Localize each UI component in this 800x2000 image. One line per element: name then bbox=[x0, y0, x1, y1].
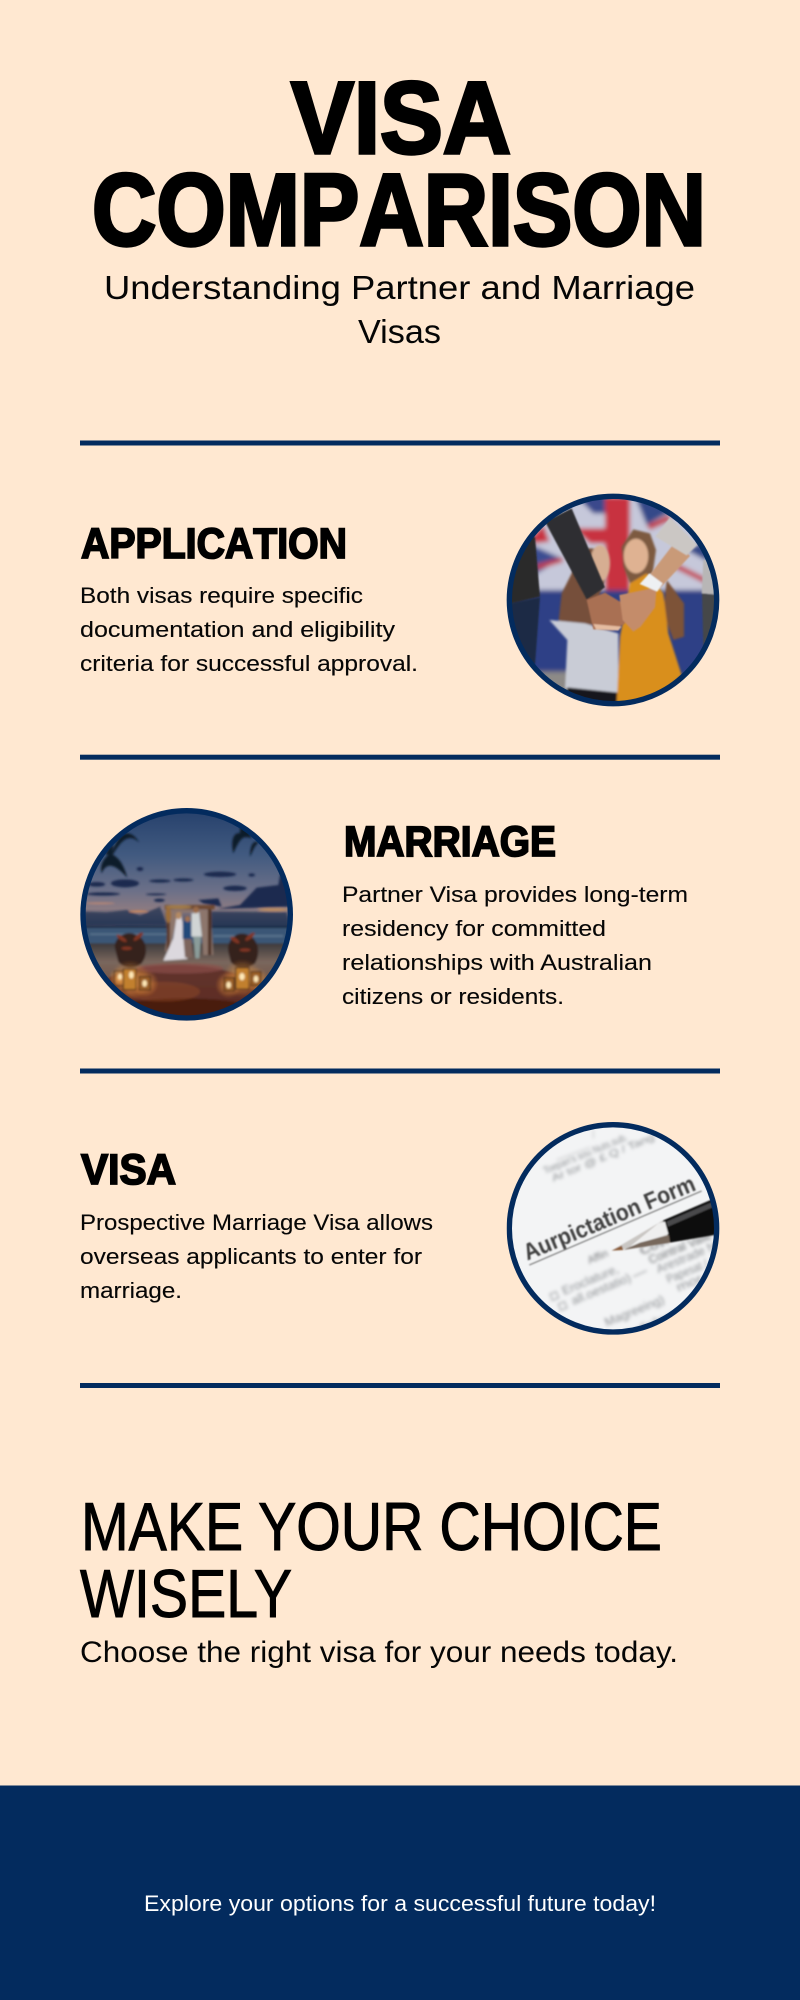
clouds bbox=[83, 867, 292, 927]
panel: marriage bbox=[80, 808, 686, 1021]
heading: application: APPLICATION bbox=[81, 520, 347, 568]
text block: marriage: citizens or residents. bbox=[342, 984, 564, 1009]
image: family holding hands before Australian flag bbox=[506, 494, 720, 706]
image: application form and pen: Ar tor @ £ Q / Tang bbox=[550, 1132, 656, 1184]
image border bbox=[83, 811, 290, 1018]
title bbox=[92, 61, 706, 267]
panel: application bbox=[80, 494, 720, 706]
text block: marriage: Partner Visa provides long-term bbox=[342, 882, 688, 907]
water bbox=[86, 927, 287, 946]
text block: marriage bbox=[342, 882, 688, 1009]
arm sleeve bbox=[545, 508, 605, 599]
image: application form and pen: Cointral Valle bbox=[646, 1228, 714, 1267]
text block: visa: marriage. bbox=[80, 1278, 182, 1303]
girl right bbox=[663, 580, 684, 640]
text block: marriage: residency for committed bbox=[342, 916, 606, 941]
image: beach wedding at dusk bbox=[80, 808, 293, 1021]
text block: visa bbox=[80, 1210, 433, 1303]
hands bbox=[587, 593, 625, 631]
image: application form and pen: Medicilant bbox=[619, 1308, 677, 1343]
text block: application: Both visas require specific bbox=[80, 583, 363, 608]
heading: make your choice wisely: WISELY bbox=[80, 1556, 292, 1632]
title: VISA bbox=[291, 61, 511, 175]
image: application form and pen bbox=[506, 1122, 720, 1335]
subtitle: Visas bbox=[358, 313, 441, 350]
subtitle bbox=[104, 269, 695, 350]
image: application form and pen: Magreeing) bbox=[602, 1292, 666, 1329]
image: application form and pen: mor bbox=[674, 1271, 704, 1294]
text block: visa: overseas applicants to enter for bbox=[80, 1244, 423, 1269]
tagline: Choose the right visa for your needs today. bbox=[80, 1636, 678, 1669]
text block: application: criteria for successful approval. bbox=[80, 651, 418, 676]
heading: visa: VISA bbox=[81, 1146, 176, 1194]
couple bbox=[163, 916, 187, 961]
lantern glow bbox=[109, 959, 269, 1000]
pen bbox=[662, 1199, 714, 1244]
text block: marriage: relationships with Australian bbox=[342, 950, 652, 975]
left person bbox=[508, 537, 540, 604]
arch bbox=[165, 910, 213, 955]
heading: make your choice wisely bbox=[80, 1489, 662, 1632]
image: application form and pen: Arestrade N bbox=[654, 1239, 718, 1276]
image: application form and pen: Papesat / bbox=[664, 1256, 710, 1286]
footer text: Explore your options for a successful future today! bbox=[144, 1891, 656, 1916]
palms bbox=[101, 827, 259, 878]
subtitle: Understanding Partner and Marriage bbox=[104, 269, 695, 306]
panel: visa bbox=[80, 1122, 720, 1335]
sand bbox=[90, 942, 284, 1003]
image: application form and pen: all.oestatio) bbox=[569, 1271, 633, 1308]
image: application form and pen: Eroclature, bbox=[560, 1262, 621, 1298]
heading: marriage: MARRIAGE bbox=[344, 818, 556, 866]
image: application form and pen: Covi bbox=[637, 1233, 671, 1258]
right arm bbox=[650, 546, 690, 588]
text block: application bbox=[80, 583, 418, 676]
lanterns bbox=[114, 968, 261, 991]
image: application form and pen: Toepan's sou Nuts.sub. bbox=[542, 1132, 629, 1177]
flowers bbox=[115, 933, 258, 968]
image: application form and pen: Affin bbox=[586, 1248, 610, 1267]
title: COMPARISON bbox=[92, 153, 706, 267]
image border bbox=[509, 496, 717, 704]
girl left bbox=[558, 548, 605, 628]
text block: visa: Prospective Marriage Visa allows bbox=[80, 1210, 433, 1235]
footer band bbox=[0, 1786, 800, 2000]
form title: Aurpictation Form bbox=[519, 1170, 699, 1265]
text block: application: documentation and eligibility bbox=[80, 617, 396, 642]
image border bbox=[509, 1125, 717, 1332]
heading: make your choice wisely: MAKE YOUR CHOICE bbox=[81, 1489, 662, 1565]
